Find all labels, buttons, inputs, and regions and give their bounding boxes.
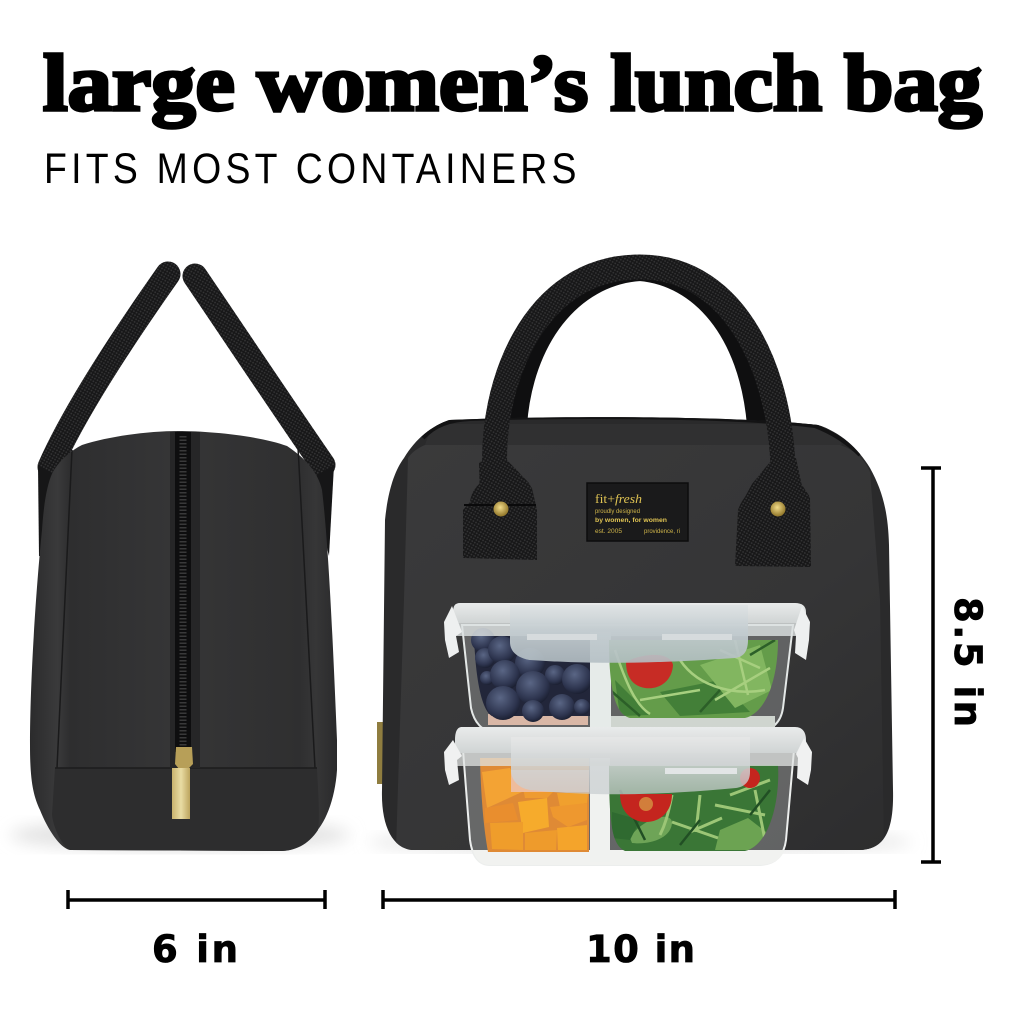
bottom glass container	[444, 727, 812, 865]
front view bag	[368, 267, 912, 852]
glass body	[462, 625, 793, 732]
ground shadow	[10, 819, 350, 851]
bag body	[30, 431, 337, 851]
front panel	[396, 445, 884, 850]
left handle tab	[463, 458, 537, 560]
divider	[590, 632, 611, 730]
ground shadow	[368, 832, 912, 852]
dimension: side width: 6 in	[152, 928, 238, 971]
gold side tab	[377, 722, 384, 784]
dimension: front width	[383, 890, 895, 971]
rim	[455, 753, 803, 766]
orange cubes	[480, 758, 589, 852]
brand label: by women, for women	[595, 517, 667, 524]
latch flap	[510, 605, 748, 663]
subtitle: FITS MOST CONTAINERS	[44, 145, 576, 193]
lid	[453, 603, 806, 623]
blueberries	[471, 628, 592, 722]
zipper tape	[170, 432, 200, 768]
top glass container	[444, 603, 810, 732]
salad	[609, 640, 778, 718]
right handle tab	[735, 458, 811, 567]
rear handle strand	[516, 270, 758, 425]
salad	[609, 765, 778, 851]
dimension: front width: 10 in	[586, 928, 695, 971]
brand label: proudly designed	[595, 509, 640, 515]
rivets	[494, 502, 508, 516]
cherry tomato	[626, 655, 673, 688]
strap ends	[38, 465, 60, 556]
side view bag	[10, 274, 350, 851]
clips	[444, 740, 462, 785]
zipper teeth	[175, 432, 191, 752]
base panel	[52, 768, 319, 851]
rim	[455, 623, 798, 636]
lid	[455, 727, 806, 753]
cherry tomato	[620, 794, 672, 822]
front handle	[495, 267, 783, 472]
brand label: providence, ri	[644, 529, 680, 535]
clips	[444, 606, 462, 658]
left handle	[50, 274, 168, 467]
glass body	[463, 750, 794, 865]
top zipper	[423, 417, 860, 455]
top gusset	[810, 424, 830, 430]
glass base	[473, 850, 784, 865]
bag body	[382, 417, 893, 850]
brand label: est. 2005	[595, 528, 622, 535]
dimension: height	[921, 468, 989, 862]
gold zipper pull	[172, 747, 193, 819]
bag panels	[396, 417, 884, 850]
title: large women’s lunch bag	[43, 40, 982, 128]
dimension: side width	[68, 890, 325, 971]
divider	[590, 758, 610, 862]
glass floor	[610, 716, 775, 728]
brand label	[587, 483, 688, 541]
right handle	[195, 276, 323, 465]
latch flap	[511, 737, 750, 794]
brand label: fit+fresh	[595, 491, 642, 506]
gusset seams	[57, 447, 315, 768]
dimension: height: 8.5 in	[946, 597, 989, 727]
pink floor	[488, 714, 588, 725]
